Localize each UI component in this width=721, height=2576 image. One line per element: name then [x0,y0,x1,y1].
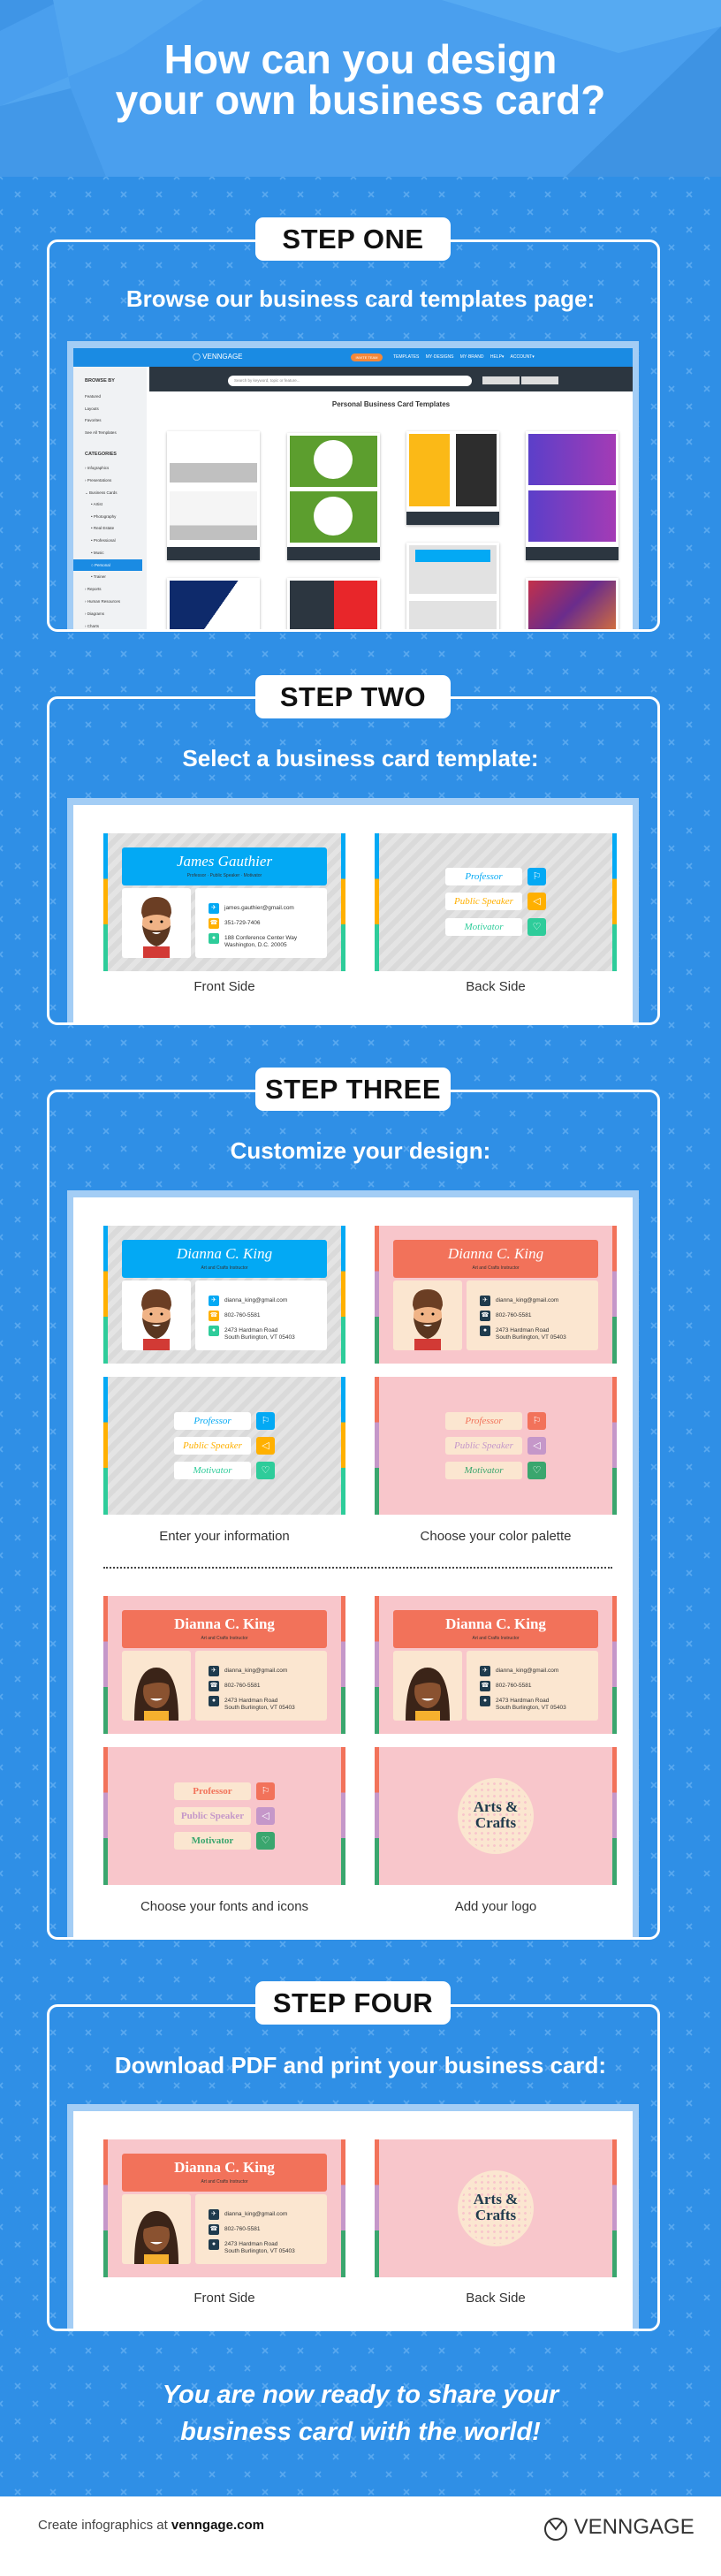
footer text: Create infographics at venngage.com [38,2518,264,2533]
screenshot: templates page: INVITE TEAM [355,355,378,360]
screenshot: templates page: › Reports [85,587,102,591]
closing message: You are now ready to share your [163,2381,558,2409]
screenshot: templates page: › Presentations [85,478,111,483]
caption: enter info: Enter your information [159,1529,290,1544]
card: enter info front: ● [212,1327,216,1334]
card: blue back: ◁ [533,896,541,907]
card: logo front: ☎ [482,1683,489,1689]
card: palette front: ✈ [482,1297,488,1303]
screenshot: templates page: › Human Resources [85,599,120,604]
heading: step three: STEP THREE [265,1074,441,1105]
closing message: business card with the world! [180,2418,541,2446]
title: How can you design [164,36,557,82]
screenshot: templates page: • Photography [91,514,116,519]
closing message [163,2381,560,2446]
card: blue front: James Gauthier [177,853,272,870]
heading: step one [255,217,451,261]
card: enter info back: ⚐ [262,1416,269,1426]
screenshot: templates page: › Charts [85,624,99,628]
screenshot: templates page: • Real Estate [91,526,114,530]
card: final front: dianna_king@gmail.com [224,2211,287,2217]
caption: back side: Back Side [466,979,526,994]
card: blue back: Professor [465,871,503,882]
card: palette front: ☎ [482,1312,489,1318]
card: logo front: ● [483,1698,487,1704]
screenshot: templates page: Search by keyword, topic or feature... [234,378,300,383]
screenshot: templates page: • Trainer [91,574,106,579]
card: enter info back: Public Speaker [183,1440,242,1451]
card: blue back: ⚐ [533,871,541,882]
card preview: step two [67,798,639,1022]
card: final front: ☎ [210,2226,217,2232]
card: fonts front: Dianna C. King [174,1615,275,1632]
card: enter info front: 802-760-5581 [224,1312,260,1318]
card preview: step four [67,2104,639,2329]
heading: step two [255,675,451,718]
card: final front: ● [212,2241,216,2247]
caption: front side: Front Side [194,2291,255,2306]
card: enter info front: 2473 Hardman Road [224,1327,277,1334]
card: enter info back [103,1377,345,1515]
card: fonts front: ☎ [210,1683,217,1689]
card: palette back: Professor [465,1416,503,1426]
card: fonts front: 2473 Hardman Road [224,1698,277,1704]
card: logo front: Art and Crafts Instructor [472,1636,520,1641]
card: fonts front: Art and Crafts Instructor [201,1636,248,1641]
caption: color palette: Choose your color palette [421,1529,571,1544]
card: palette back: ♡ [533,1465,541,1476]
card: final front: 2473 Hardman Road [224,2241,277,2247]
card: logo front: Dianna C. King [445,1615,546,1632]
card: enter info back: Professor [194,1416,231,1426]
screenshot: templates page [67,341,639,629]
card grid: step three [67,1190,639,1937]
screenshot: templates page: Personal Business Card Templates [332,400,450,408]
heading: step three [255,1068,451,1111]
card: logo front [375,1596,617,1734]
screenshot: templates page: ○ Personal [91,563,110,567]
card: final front [103,2139,345,2277]
header band [0,0,721,177]
card: blue back: ♡ [533,922,541,932]
text: download: Download PDF and print your business card: [115,2052,606,2078]
card: fonts back: Professor [193,1786,232,1797]
title [116,36,605,123]
logo: venngage: VENNGAGE [574,2515,694,2539]
card: final front: Art and Crafts Instructor [201,2179,248,2185]
text: customize: Customize your design: [231,1137,490,1164]
card: enter info back: Motivator [193,1465,231,1476]
panel: step one [47,239,660,632]
card: blue back [375,833,617,971]
card: fonts front: ✈ [211,1668,216,1674]
screenshot: templates page: › Infographics [85,466,109,470]
caption: back side: Back Side [466,2291,526,2306]
card: palette front: 802-760-5581 [496,1312,531,1318]
title: your own business card? [116,77,605,123]
card: logo front: 2473 Hardman Road [496,1698,549,1704]
heading: step four [255,1981,451,2025]
heading: step four: STEP FOUR [273,1987,433,2018]
caption: fonts and icons: Choose your fonts and icons [140,1899,308,1914]
screenshot: templates page: › Diagrams [85,612,104,616]
card: fonts front: South Burlington, VT 05403 [224,1705,295,1711]
card: enter info front [103,1226,345,1364]
card: fonts back: ♡ [262,1835,269,1846]
card: palette back: ◁ [533,1440,541,1451]
card: final front: 802-760-5581 [224,2226,260,2232]
heading: step two: STEP TWO [280,681,426,712]
card: logo front: South Burlington, VT 05403 [496,1705,566,1711]
card: blue back: Public Speaker [454,896,513,907]
card: logo front: 802-760-5581 [496,1683,531,1689]
heading: step one: STEP ONE [282,224,424,255]
screenshot: templates page: • Artist [91,502,102,506]
card: logo front: dianna_king@gmail.com [496,1668,558,1674]
screenshot: templates page: ⌄ Business Cards [85,490,118,495]
card: final front: ✈ [211,2211,216,2217]
card: blue front: Washington, D.C. 20005 [224,942,287,948]
card: blue front: 351-729-7406 [224,920,260,926]
card: final back: Arts & [474,2191,518,2207]
card: palette front: 2473 Hardman Road [496,1327,549,1334]
card: blue front: Professor · Public Speaker · Motivator [187,873,262,878]
card: logo back: Arts & [474,1798,518,1815]
screenshot: templates page: Featured [85,394,101,399]
screenshot: templates page: BROWSE BY [85,378,115,384]
card: blue front: ✈ [211,905,216,911]
card: blue front: 188 Conference Center Way [224,935,297,941]
card: palette front [375,1226,617,1364]
caption: add logo: Add your logo [455,1899,536,1914]
card: fonts front: dianna_king@gmail.com [224,1668,287,1674]
card: fonts back: Motivator [192,1835,233,1846]
screenshot: templates page: • Professional [91,538,116,543]
panel: step three [47,1090,660,1940]
card: enter info front: Art and Crafts Instructor [201,1265,248,1271]
card: blue front: ☎ [210,920,217,926]
card: palette front: dianna_king@gmail.com [496,1297,558,1303]
caption: front side: Front Side [194,979,255,994]
card: blue back: Motivator [465,922,504,932]
screenshot: templates page: See All Templates [85,430,117,435]
card: logo back [375,1747,617,1885]
panel: step two [47,696,660,1025]
card: palette front: Art and Crafts Instructor [472,1265,520,1271]
card: palette back: Public Speaker [454,1440,513,1451]
card: enter info back: ♡ [262,1465,269,1476]
card: palette back: ⚐ [533,1416,541,1426]
card: logo front: ✈ [482,1668,488,1674]
screenshot: templates page: Favorites [85,418,102,422]
card: palette front: ● [483,1327,487,1334]
card: final back [375,2139,617,2277]
footer [0,2496,721,2576]
card: fonts front [103,1596,345,1734]
screenshot: templates page: CATEGORIES [85,452,117,457]
card: enter info front: South Burlington, VT 05403 [224,1334,295,1341]
card: enter info front: dianna_king@gmail.com [224,1297,287,1303]
card: final back: Crafts [475,2207,516,2223]
card: blue front: james.gauthier@gmail.com [224,905,294,911]
card: palette back: Motivator [465,1465,504,1476]
card: fonts back: Public Speaker [181,1811,244,1821]
card: fonts front: 802-760-5581 [224,1683,260,1689]
card: palette back [375,1377,617,1515]
screenshot: templates page: ◯ VENNGAGE [193,353,243,361]
screenshot: templates page: TEMPLATES MY·DESIGNS MY·BRAND HELP▾ ACCOUNT▾ [393,354,535,360]
text: browse: Browse our business card templates page: [126,285,595,312]
card: final front: South Burlington, VT 05403 [224,2248,295,2254]
card: fonts back [103,1747,345,1885]
card: logo back: Crafts [475,1814,516,1831]
card: blue front: ● [212,935,216,941]
screenshot: templates page: Layouts [85,407,99,411]
card: palette front: South Burlington, VT 05403 [496,1334,566,1341]
screenshot: templates page: • Music [91,551,104,555]
card: enter info back: ◁ [262,1440,269,1451]
card: enter info front: Dianna C. King [177,1245,272,1262]
panel: step four [47,2004,660,2331]
card: enter info front: ✈ [211,1297,216,1303]
card: blue front [103,833,345,971]
card: fonts back: ⚐ [262,1786,269,1797]
card: final front: Dianna C. King [174,2159,275,2176]
text: select template: Select a business card template: [182,745,539,771]
card: fonts front: ● [212,1698,216,1704]
card: enter info front: ☎ [210,1312,217,1318]
card: palette front: Dianna C. King [448,1245,543,1262]
card: fonts back: ◁ [262,1811,269,1821]
